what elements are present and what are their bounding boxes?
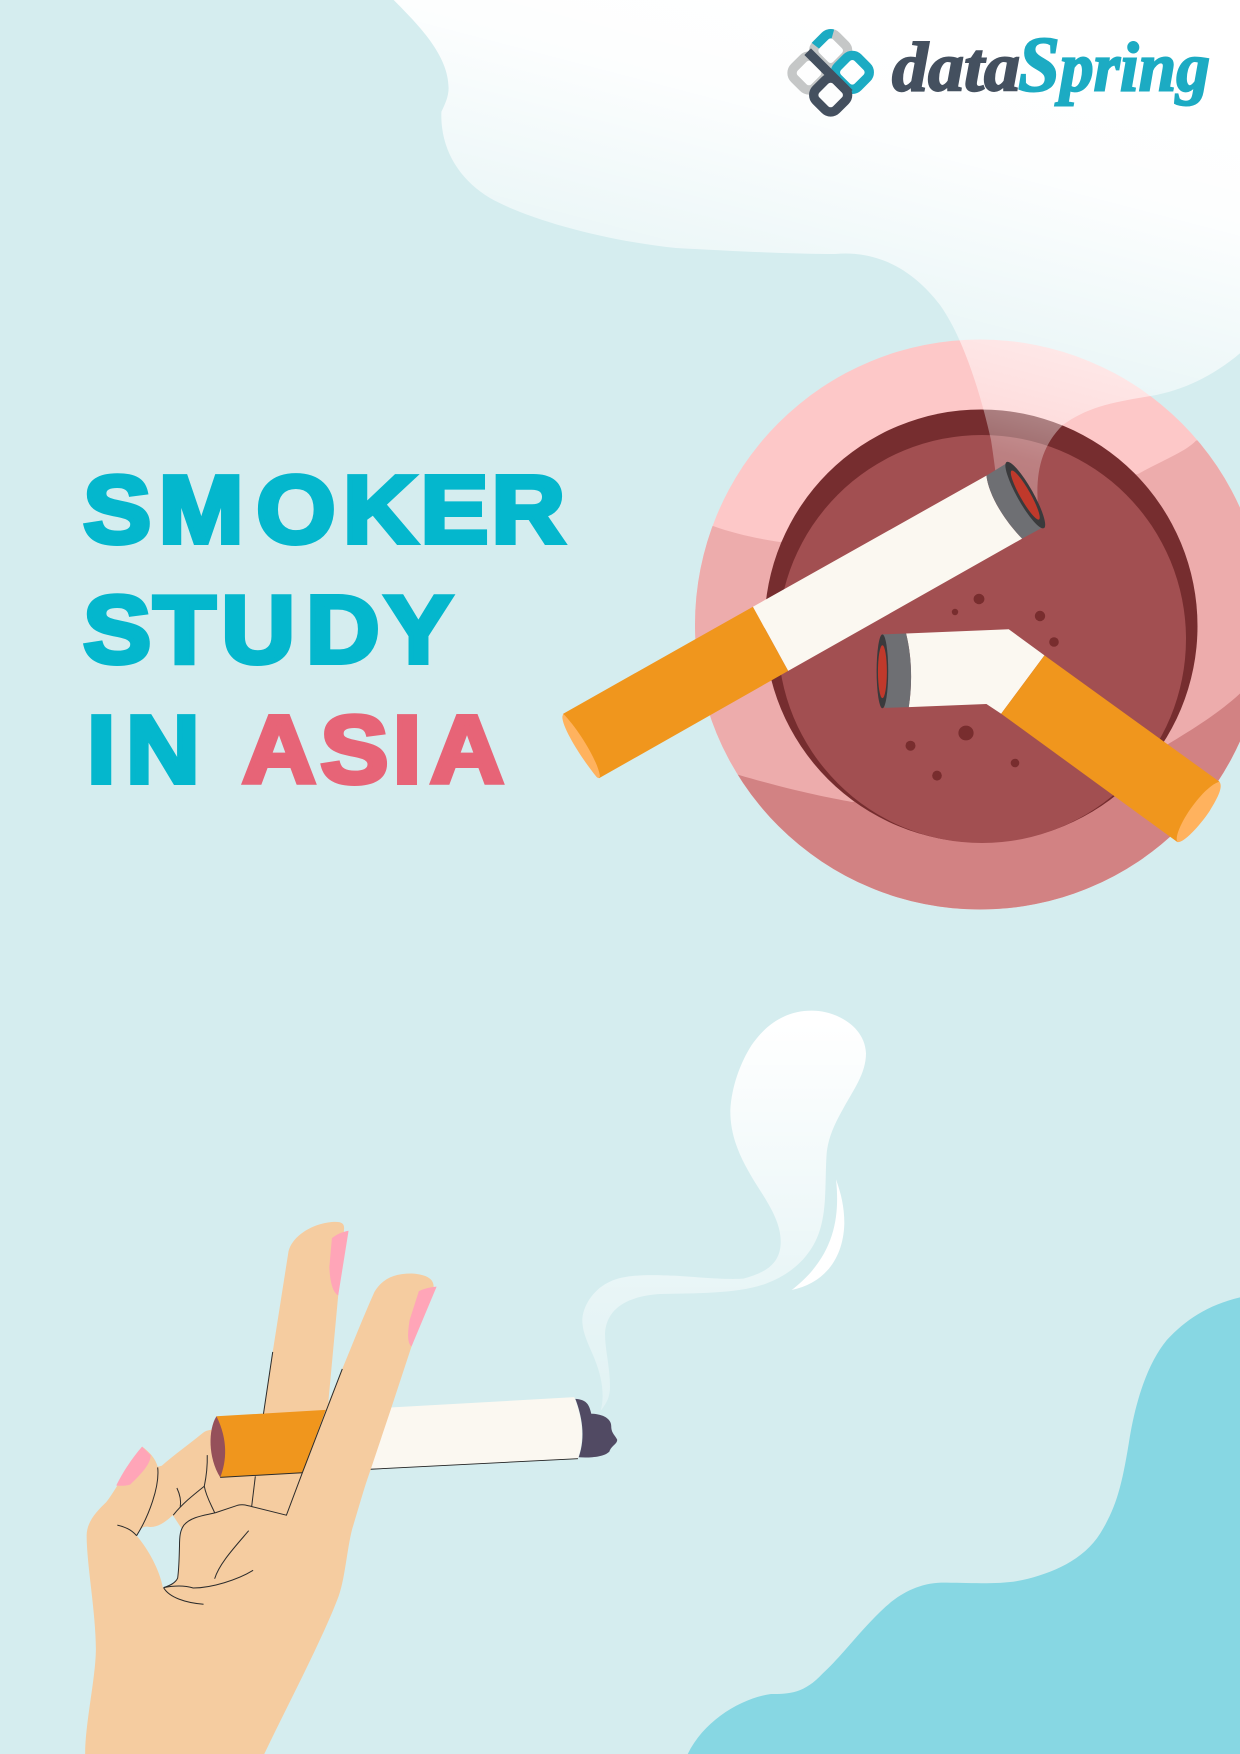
paper: [906, 629, 1044, 714]
ember: [878, 645, 887, 698]
logo: [789, 20, 1210, 115]
filter: [1001, 655, 1219, 842]
hand: [85, 1222, 434, 1754]
ashtray outer rim: [690, 335, 1240, 950]
filter end: [1177, 782, 1221, 842]
ashtray floor: [778, 435, 1186, 843]
nail: front finger: [408, 1287, 437, 1347]
title word: ASIA: ASIA: [242, 695, 504, 803]
white cloud top: [394, 0, 1240, 507]
hand with cigarette: [85, 1222, 617, 1754]
title: [83, 455, 565, 803]
nail: back finger: [329, 1231, 349, 1295]
cigarette paper edge: [370, 1459, 578, 1469]
blue wave bottom right: [688, 1297, 1240, 1754]
paper: [753, 476, 1022, 671]
ember: [1007, 468, 1044, 522]
title line: SMOKER: SMOKER: [83, 455, 565, 563]
ash dots: [906, 594, 1059, 781]
smoke plume: [582, 1011, 866, 1411]
ashtray: [690, 335, 1240, 950]
burnt end: [1000, 458, 1051, 532]
title word: IN: IN: [87, 695, 200, 803]
smoke crescent: [792, 1179, 844, 1290]
burnt band: [986, 463, 1044, 539]
cigarette filter: [216, 1410, 326, 1477]
cigarette paper: [367, 1397, 582, 1469]
logo icon: [789, 30, 873, 115]
cigarette: bent butt in ashtray: [877, 629, 1221, 842]
title line: STUDY: STUDY: [83, 575, 452, 683]
cigarette filter end: [211, 1416, 225, 1477]
smoke: [582, 1011, 866, 1411]
logo wordmark: [892, 20, 1210, 108]
burnt band: [882, 634, 911, 708]
logo wordmark: data: [892, 30, 1020, 106]
filter end: [562, 714, 600, 778]
nail: thumb: [116, 1447, 151, 1486]
ashtray inner wall: [764, 410, 1198, 842]
filter: [563, 607, 788, 778]
cigarette: upper in ashtray: [562, 458, 1051, 778]
finger and palm lines: [117, 1352, 342, 1604]
logo wordmark: Spring: [1018, 20, 1210, 108]
burnt end: [877, 634, 888, 708]
cigarette ash: [575, 1399, 617, 1457]
